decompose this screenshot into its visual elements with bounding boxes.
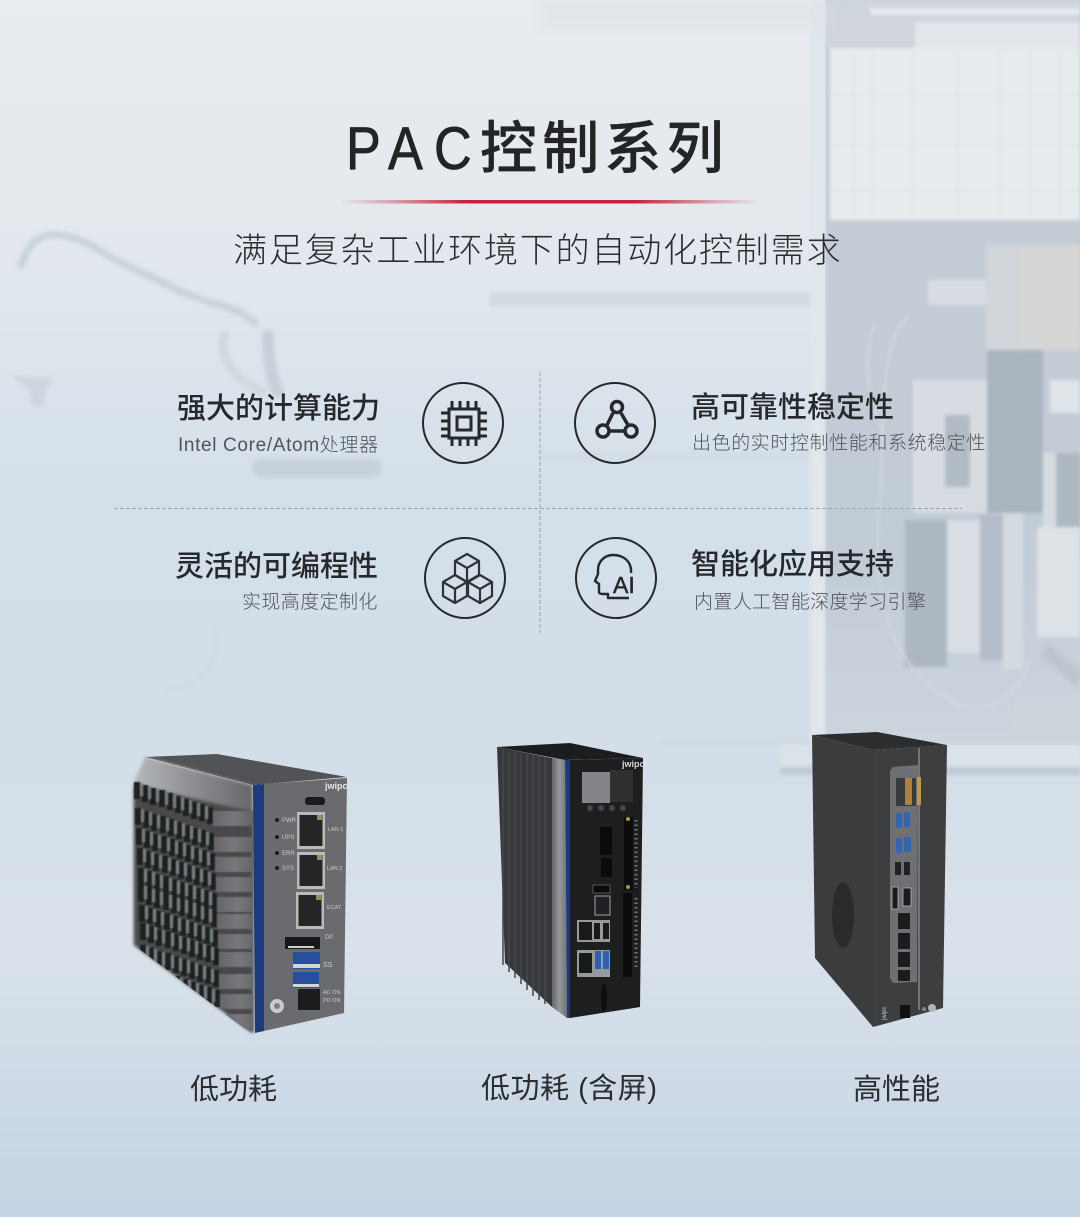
dashed grid dividers xyxy=(114,372,962,633)
blue strip xyxy=(565,760,570,1018)
product: high-performance unit xyxy=(812,732,947,1027)
screen and ports xyxy=(577,759,645,1012)
front panel xyxy=(570,758,643,1018)
icon: connected nodes xyxy=(575,383,655,463)
title: 控制系列 xyxy=(480,117,729,181)
top face xyxy=(145,754,347,785)
title: PAC xyxy=(346,115,472,182)
ports: LAN 2 xyxy=(327,866,342,872)
cooling fins xyxy=(134,782,260,1029)
ports: SS xyxy=(323,962,333,969)
blue strip xyxy=(253,784,264,1033)
ports: jwipc xyxy=(324,781,348,791)
ports: PD ON xyxy=(323,998,340,1004)
feature description: 内置人工智能深度学习引擎 xyxy=(694,591,926,613)
side panel xyxy=(812,735,873,1027)
icon: AI head xyxy=(576,538,656,618)
I/O panel: jwipc xyxy=(882,1007,888,1021)
grey corner xyxy=(552,758,567,1018)
screen and ports: jwipc xyxy=(621,759,645,769)
ports xyxy=(270,781,348,1013)
background photo: control cabinet xyxy=(490,0,1080,775)
feature heading: 强大的计算能力 xyxy=(177,392,380,425)
product: low-power unit xyxy=(134,754,348,1033)
background photo: robot arm xyxy=(12,235,372,690)
ports: SYS xyxy=(282,866,294,872)
front panel xyxy=(264,778,347,1031)
icon: processor chip xyxy=(423,383,503,463)
heat-sink side xyxy=(134,757,253,1033)
ports: PWR xyxy=(282,818,297,824)
shadow between fins xyxy=(134,785,253,1033)
product label: high performance: 高性能 xyxy=(853,1073,940,1106)
ports: LAN 1 xyxy=(328,827,343,833)
ports: UPS xyxy=(282,835,294,841)
title xyxy=(346,115,729,182)
ports: AC ON xyxy=(323,990,340,996)
feature description: 实现高度定制化 xyxy=(242,591,378,613)
product label: low power: 低功耗 xyxy=(190,1073,277,1106)
top face xyxy=(497,743,643,760)
front panel xyxy=(873,745,947,1027)
subtitle: 满足复杂工业环境下的自动化控制需求 xyxy=(233,232,842,270)
feature heading: 灵活的可编程性 xyxy=(175,550,378,583)
icon: stacked cubes xyxy=(425,538,505,618)
ports: ECAT xyxy=(327,905,342,911)
product label: low power with screen: 低功耗 (含屏) xyxy=(481,1072,657,1105)
feature: AI application xyxy=(576,538,926,618)
product: low-power unit with screen xyxy=(497,743,645,1018)
feature description: Intel Core/Atom处理器 xyxy=(178,434,378,456)
feature: flexible programming xyxy=(175,538,505,618)
I/O panel xyxy=(882,748,936,1021)
red divider under title xyxy=(340,200,760,204)
icon: AI head: AI xyxy=(613,572,635,598)
feature heading: 智能化应用支持 xyxy=(691,548,894,581)
finned side xyxy=(497,747,552,1007)
side vents xyxy=(503,750,545,1004)
feature heading: 高可靠性稳定性 xyxy=(691,391,894,424)
feature: computing power xyxy=(177,383,503,463)
feature description: 出色的实时控制性能和系统稳定性 xyxy=(692,432,986,454)
top face xyxy=(812,732,947,750)
feature: high reliability xyxy=(575,383,986,463)
ports: DP xyxy=(325,935,333,941)
side vent xyxy=(832,882,854,948)
ports: ERR xyxy=(282,851,295,857)
